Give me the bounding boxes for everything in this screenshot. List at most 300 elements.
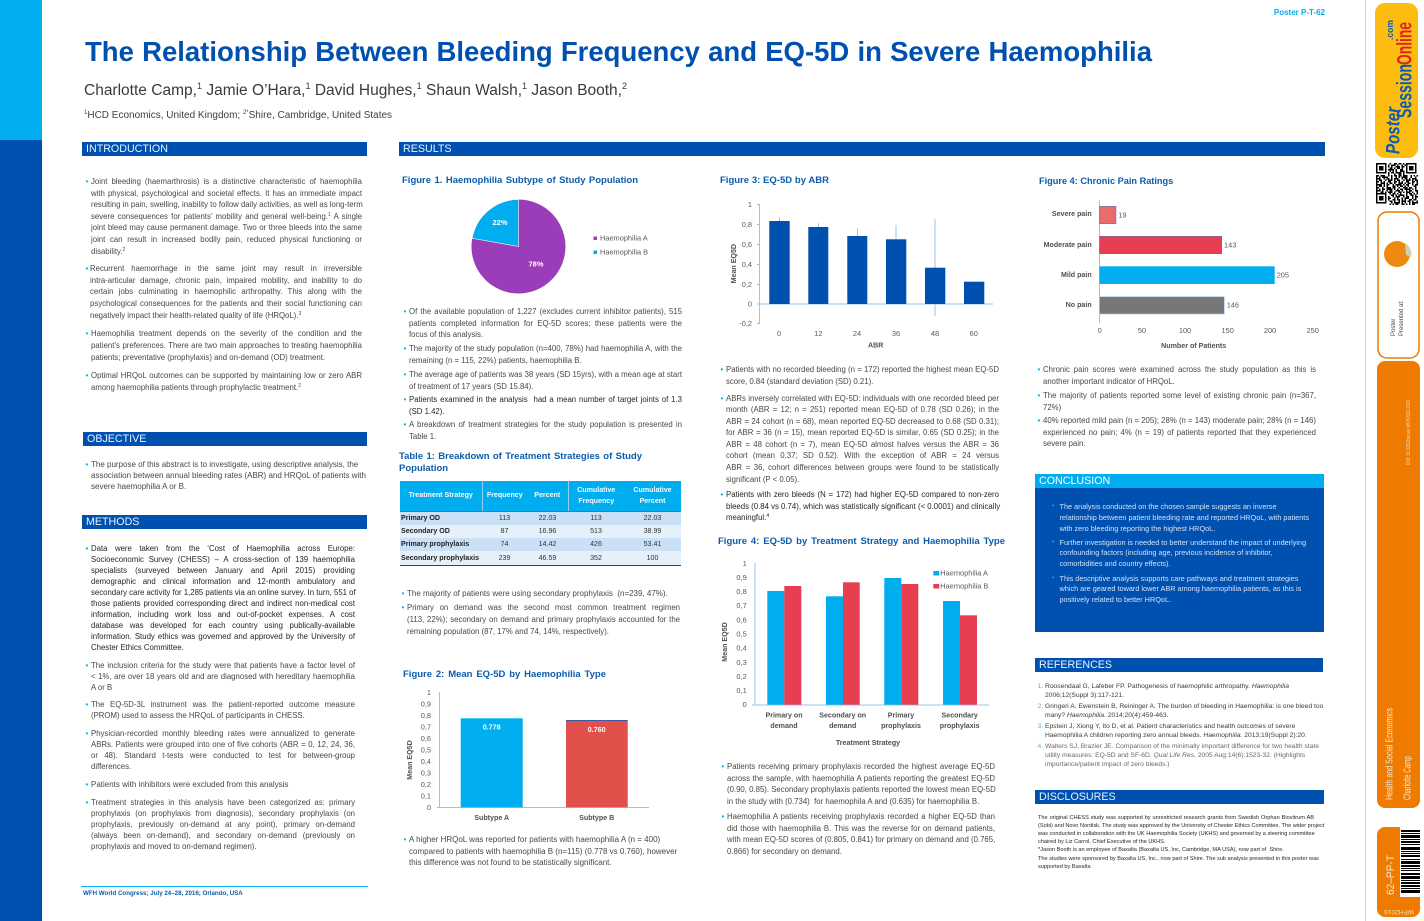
results text block 12: (0.90, 0.85). Secondary prophylaxis patients reported the lowest mean EQ-5D [727, 785, 996, 794]
bar chart: EQ-5D by ABR: ABR [868, 342, 883, 350]
text: references: 2006;12(Suppl 3):117-121. [1045, 692, 1124, 698]
results text block 5: Table 1. [409, 432, 436, 441]
bar chart: EQ-5D by treatment strategy and haemophilia type: 0,4 [736, 644, 747, 653]
horizontal bar chart: chronic pain ratings: 200 [1264, 326, 1276, 335]
bar chart: mean EQ-5D by haemophilia type: 0 [427, 803, 431, 812]
logo: Poster Session Online: Poster [1384, 106, 1404, 154]
text: introduction bullet 2 [86, 264, 362, 320]
heading: conclusion: CONCLUSION [1039, 475, 1110, 487]
text: • [404, 307, 406, 316]
text: • [404, 835, 406, 844]
text: methods bullet 3 [86, 700, 355, 720]
panel: orange topic strip: Charlotte Camp [1402, 756, 1414, 800]
text: methods bullet 1: specialists (surveyed between January and April 2015) providing [91, 566, 355, 575]
results text block 11: bleeds (0.84 vs 0.74), which was statistically significant (< 0.0001) and clinically [726, 502, 1000, 511]
text: references: Walters SJ, Brazier JE. Comparison of the minimally important difference for two health state [1045, 743, 1319, 750]
footer congress line: WFH World Congress; July 24–28, 2016; Orlando, USA [83, 890, 243, 897]
text: references: importance/patient impact of zero bleeds.) [1045, 761, 1170, 768]
text: • [86, 177, 88, 186]
text: methods bullet 6: prophylaxis (on prophylaxis from diagnosis), secondary prophylaxis (on [91, 809, 355, 818]
pie chart: haemophilia subtype: Haemophilia A [600, 234, 648, 242]
results text block 7: remaining population (87, 17% and 74, 14%, respectively). [407, 627, 609, 636]
text: • [404, 370, 406, 379]
text: introduction bullet 2: certain jobs culminating in haemophilic arthropathy. This along with the [90, 287, 362, 296]
heading: methods [82, 515, 367, 529]
bar chart: mean EQ-5D by haemophilia type: 0,6 [421, 734, 431, 743]
bar chart: EQ-5D by treatment strategy and haemophilia type: Primary [888, 711, 914, 719]
results text block 4 [404, 395, 682, 416]
panel: conclusion: • [1052, 539, 1054, 546]
results text block 1: patients completed information for EQ-5D scores; these patients were the [409, 319, 682, 328]
text: methods bullet 3: (PROM) used to assess the HRQoL of participants in CHESS. [91, 711, 305, 720]
text: disclosures: chaired by Liz Carrol, Chief Executive of the UKHS. [1038, 839, 1165, 845]
horizontal bar chart: chronic pain ratings: 250 [1307, 326, 1319, 335]
bar chart: mean EQ-5D by haemophilia type: Subtype B [579, 814, 614, 822]
text: introduction bullet 4: Optimal HRQoL outcomes can be supported by maintaining low or zero ABR [91, 371, 362, 380]
heading: disclosures: DISCLOSURES [1039, 791, 1116, 803]
panel: orange topic strip: DOI: 10.3252/pso.eu.WFH2016.2016 [1406, 400, 1412, 465]
text: introduction bullet 1: disability.2 [91, 247, 125, 256]
results text block 6: The majority of patients were using secondary prophylaxis (n=239, 47%). [407, 589, 668, 598]
text: conclusion bullet 3 [1052, 574, 1301, 604]
footer congress line [81, 886, 368, 898]
horizontal bar chart: chronic pain ratings [1044, 200, 1319, 350]
table 1: 38.99 [644, 527, 661, 535]
title: The Relationship Between Bleeding Frequency and EQ-5D in Severe Haemophilia [85, 36, 1152, 67]
results text block 10: ABR = 24 cohort (n = 68), mean reported EQ-5D decreased to 0.68 (SD 0.31); [726, 417, 999, 426]
text: objective: The purpose of this abstract is to investigate, using descriptive analysis, the [91, 460, 358, 469]
logo: Poster Session Online: Session [1394, 64, 1416, 118]
bar chart: EQ-5D by ABR: 60 [970, 329, 978, 338]
bar chart: EQ-5D by ABR: 0,8 [742, 220, 752, 229]
figure 4 chronic pain title: Figure 4: Chronic Pain Ratings [1039, 176, 1173, 186]
table 1: Treatment Strategy [409, 491, 473, 499]
text: methods bullet 4: differences. [91, 762, 131, 771]
heading: introduction [82, 142, 367, 156]
panel: poster presented at: Poster [1391, 319, 1397, 336]
results text block 1 [404, 307, 682, 339]
results text block 13: did those with haemophilia B. This was the reverse for on demand patients, [727, 824, 995, 833]
text: disclosures: The original CHESS study was supported by unrestricted research grants from Swedish Orphan Biovitrum AB [1038, 815, 1314, 821]
panel: poster code and barcode: WFH2016 [1383, 908, 1414, 914]
horizontal bar chart: chronic pain ratings: 19 [1118, 210, 1127, 220]
text: • [722, 762, 724, 771]
text: • [86, 729, 88, 738]
text: conclusion bullet 3: positively related to better HRQoL. [1060, 595, 1171, 604]
text: conclusion bullet 2: comorbidities and country effects). [1060, 559, 1170, 568]
text: methods bullet 6 [86, 798, 355, 851]
bar chart: mean EQ-5D by haemophilia type: 0,2 [421, 780, 431, 789]
bar chart: EQ-5D by ABR: -0,2 [739, 319, 752, 328]
table 1: Percent [639, 497, 666, 505]
text: • [402, 603, 404, 612]
results text block 16 [1038, 416, 1316, 448]
table 1: 16.96 [539, 527, 556, 535]
heading: methods: METHODS [86, 516, 139, 528]
results text block 10: ABR = 48 cohort (n = 7), mean EQ-5D almost halves versus the ABR = 36 [726, 440, 999, 449]
text: methods bullet 4 [86, 729, 355, 771]
text: references: Gringeri A, Ewenstein B, Reininger A. The burden of bleeding in Haemophilia: is one bleed too [1045, 703, 1323, 710]
results text block 7: (113, 22%); secondary on demand and primary prophylaxis accounted for the [407, 615, 680, 624]
bar chart: mean EQ-5D by haemophilia type: 0,1 [421, 791, 431, 800]
results text block 16: experienced no pain; 4% (n = 19) of patients reported that they experienced [1043, 428, 1316, 437]
horizontal bar chart: chronic pain ratings: 100 [1179, 326, 1191, 335]
bar chart: EQ-5D by treatment strategy and haemophilia type: 0,1 [736, 686, 747, 695]
results text block 14: another important indicator of HRQoL. [1043, 377, 1175, 386]
bar chart: EQ-5D by treatment strategy and haemophilia type: Haemophilia A [940, 568, 988, 578]
text: methods bullet 1: information, including work loss and out-of-pocket expenses. A cost [91, 610, 355, 619]
text: 3. [1038, 723, 1043, 730]
text: methods bullet 1: Socioeconomic Survey (CHESS) – A cross-section of 139 haemophilia [91, 555, 355, 564]
bar chart: mean EQ-5D by haemophilia type: 0,4 [421, 757, 431, 766]
table 1: 22.03 [644, 514, 661, 522]
horizontal bar chart: chronic pain ratings: Moderate pain [1044, 241, 1092, 249]
text: objective: association between annual bleeding rates (ABR) and HRQoL of patients with [91, 471, 366, 480]
text: disclosures [1038, 815, 1324, 870]
figure 4 title: Figure 4: EQ-5D by Treatment Strategy and Haemophilia Type [718, 536, 1005, 546]
results text block 10: for ABR = 36 (n = 15), mean reported EQ-5D is similar, 0.65 (SD 0.25); in the [726, 428, 999, 437]
horizontal bar chart: chronic pain ratings: No pain [1066, 301, 1092, 309]
panel: poster presented at [1377, 211, 1420, 359]
bar chart: mean EQ-5D by haemophilia type: Subtype A [474, 814, 509, 822]
table 1: 113 [499, 514, 510, 522]
bar chart: EQ-5D by ABR: Mean EQ5D [730, 244, 738, 283]
results text block 7 [402, 603, 680, 636]
text: conclusion bullet 1 [1052, 502, 1309, 532]
bar chart: EQ-5D by ABR: 36 [892, 329, 900, 338]
bar chart: mean EQ-5D by haemophilia type: 0,7 [421, 722, 431, 731]
bar chart: mean EQ-5D by haemophilia type: 0,3 [421, 768, 431, 777]
panel: orange topic strip: Health and Social Economics [1384, 708, 1396, 800]
text: • [86, 780, 88, 789]
results text block 11: Patients with zero bleeds (N = 172) had higher EQ-5D compared to non-zero [726, 490, 999, 499]
panel: conclusion [1035, 474, 1324, 632]
heading: objective [83, 432, 367, 446]
bar chart: EQ-5D by treatment strategy and haemophilia type: 0,7 [736, 601, 747, 610]
text: methods bullet 3: The EQ-5D-3L instrument was the patient-reported outcome measure [91, 700, 355, 709]
text: • [86, 661, 88, 670]
panel: poster presented at: Presented at: [1399, 300, 1405, 336]
bar chart: EQ-5D by treatment strategy and haemophilia type: Haemophilia B [940, 582, 988, 590]
text: introduction bullet 2: Recurrent haemorrhage in the same joint may result in irreversible [90, 264, 362, 273]
icon: QR code [1376, 163, 1418, 205]
results text block 9: Patients with no recorded bleeding (n = 172) reported the highest mean EQ-5D [726, 365, 999, 374]
table 1: 87 [501, 527, 508, 535]
text: introduction bullet 2: intra-articular damage, chronic pain, impaired mobility, and inability to do [90, 276, 362, 285]
text: conclusion bullet 3: This descriptive analysis supports care pathways and treatment strategies [1060, 574, 1298, 583]
results text block 15: 72%) [1043, 402, 1061, 412]
text: methods bullet 4: or 48). Standard t-tests were conducted to test for between-group [91, 751, 355, 760]
text: methods bullet 6: prophylaxis and moved to on-demand regimen). [91, 842, 257, 851]
text: • [720, 490, 723, 499]
text: • [86, 371, 88, 380]
results text block 12: across the sample, with haemophilia A patients reporting the greatest EQ-5D [727, 774, 995, 782]
horizontal bar chart: chronic pain ratings: 50 [1138, 326, 1146, 335]
bar chart: EQ-5D by ABR: 0,2 [742, 280, 752, 289]
text: • [86, 329, 88, 338]
table 1: Primary OD [401, 514, 440, 522]
text: objective: severe haemophilia A or B. [91, 482, 186, 491]
heading: references [1035, 658, 1323, 672]
bar chart: EQ-5D by treatment strategy and haemophilia type: Mean EQ5D [721, 622, 729, 662]
text: introduction bullet 4 [86, 371, 362, 392]
panel: poster code and barcode [1377, 827, 1420, 919]
table 1: 352 [590, 554, 602, 562]
text: introduction bullet 3: Haemophilia treatment depends on the severity of the condition and the [91, 329, 362, 338]
pie chart: haemophilia subtype: 78% [528, 260, 544, 268]
results text block 12: Patients receiving primary prophylaxis recorded the highest average EQ-5D [727, 762, 995, 771]
text: disclosures: (Sobi) and Novo Nordisk. The study was approved by the University of Chester Ethics Committee. The wider project [1038, 823, 1324, 829]
text: • [1038, 365, 1040, 374]
bar chart: EQ-5D by ABR: 0 [748, 300, 752, 308]
panel: poster code and barcode: 62–PP-T [1385, 855, 1397, 895]
heading: references: REFERENCES [1039, 659, 1112, 671]
text: introduction bullet 2: psychological consequences for the patients and their social functioning can [90, 299, 362, 308]
table 1: 14.42 [539, 540, 556, 548]
bar chart: EQ-5D by ABR: 48 [931, 329, 939, 338]
heading: results: RESULTS [403, 143, 452, 155]
text: introduction bullet 1: resulting in pain, swelling, inability to follow daily activities, as well as long-term [91, 200, 363, 209]
bar chart: EQ-5D by treatment strategy and haemophilia type: Secondary on [819, 711, 866, 719]
bar chart: mean EQ-5D by haemophilia type: 0,9 [421, 699, 431, 708]
bar chart: EQ-5D by ABR [730, 200, 993, 350]
text: • [404, 395, 406, 404]
text: introduction bullet 2: negatively impact their health-related quality of life (HRQoL).3 [90, 311, 301, 320]
logo: Poster Session Online: .com [1385, 20, 1395, 40]
results text block 16: severe pain. [1043, 439, 1085, 448]
results text block 11: meaningful.4 [726, 513, 769, 522]
bar chart: mean EQ-5D by haemophilia type: 1 [427, 688, 431, 697]
bar chart: mean EQ-5D by haemophilia type: 0,8 [421, 711, 431, 720]
text: disclosures: *Jason Booth is an employee of Baxalta (Baxalta US, Inc, Cambridge, MA USA), now part of Shire. [1038, 847, 1284, 853]
text: conclusion bullet 2: confounding factors (including age, previous incidence of inhibitor, [1060, 548, 1272, 557]
text: methods bullet 1: secondary care activity for 1,285 patients via an online survey. In turn, 551 of [91, 588, 356, 597]
results text block 15 [1038, 391, 1316, 412]
text: disclosures: The studies were sponsored by Baxalta US, Inc., now part of Shire. The sub analysis presented in this poster was [1038, 856, 1319, 862]
results text block 10: ABR = 36, cohort differences between groups were found to be statistically [726, 463, 999, 472]
text: methods bullet 2: The inclusion criteria for the study were that patients have a factor level of [91, 661, 355, 670]
text: methods bullet 1: demographic and clinical information and 12-month ambulatory and [91, 577, 355, 586]
table 1: 426 [590, 540, 602, 548]
poster number: Poster P-T-62 [1274, 8, 1325, 17]
text: methods bullet 1: Chester Ethics Committee. [91, 643, 184, 652]
bar chart: EQ-5D by ABR: 24 [853, 329, 861, 338]
bar chart: EQ-5D by ABR: 1 [748, 200, 752, 209]
text: references [1038, 682, 1324, 768]
bar chart: EQ-5D by ABR: 0,4 [742, 260, 752, 269]
text: methods bullet 1: database was developed for each country using publically-available [91, 621, 355, 630]
table 1: Frequency [578, 497, 614, 505]
text: introduction bullet 1: with physical, psychological and societal effects. It has an immediate impact [91, 189, 362, 198]
bar chart: mean EQ-5D by haemophilia type: Mean EQ5D [406, 740, 414, 780]
text: references: Roosendaal G, Lafeber FP. Pathogenesis of haemophilic arthropathy. Haemophilia [1045, 682, 1289, 690]
text: • [402, 589, 404, 598]
text: methods bullet 2: A or B [91, 683, 112, 692]
text: conclusion bullet 1: The analysis conducted on the chosen sample suggests an inverse [1060, 502, 1277, 510]
results text block 13: Haemophilia A patients receiving prophylaxis recorded a higher EQ-5D than [727, 812, 995, 821]
bar chart: EQ-5D by treatment strategy and haemophilia type: 1 [743, 559, 747, 568]
figure 2 title: Figure 2: Mean EQ-5D by Haemophilia Type [403, 669, 606, 680]
left colour band [0, 0, 42, 921]
text: introduction bullet 1: joint bleed may cause permanent damage. Two or three bleeds into the same [91, 223, 362, 232]
table 1 title: Population [399, 463, 448, 474]
results text block 8 [404, 835, 678, 867]
pie chart: haemophilia subtype: 22% [492, 218, 508, 227]
pie chart: haemophilia subtype [471, 200, 648, 294]
text: conclusion bullet 1: with zero bleeding reporting the highest HRQoL. [1060, 524, 1215, 532]
bar chart: EQ-5D by treatment strategy and haemophilia type: 0,5 [736, 630, 747, 638]
text: introduction bullet 1: severe consequences for patients’ mobility and general well-being.1 A single [91, 212, 362, 221]
table 1: 46.59 [539, 554, 556, 562]
bar chart: EQ-5D by treatment strategy and haemophilia type: 0,6 [736, 615, 747, 624]
bar chart: EQ-5D by treatment strategy and haemophilia type: 0 [743, 700, 747, 709]
text: references: many? Haemophilia. 2014;20(4):459-463. [1045, 712, 1168, 719]
panel: conclusion: • [1052, 575, 1054, 582]
bar chart: EQ-5D by treatment strategy and haemophilia type: 0,3 [736, 658, 747, 667]
figure 3 title: Figure 3: EQ-5D by ABR [720, 175, 829, 186]
horizontal bar chart: chronic pain ratings: Mild pain [1061, 271, 1092, 279]
text: methods bullet 5: Patients with inhibitors were excluded from this analysis [91, 780, 288, 789]
results text block 2: The majority of the study population (n=400, 78%) had haemophilia A, with the [409, 344, 682, 353]
results text block 13 [722, 812, 995, 856]
bar chart: EQ-5D by ABR: 12 [814, 329, 822, 338]
text: introduction bullet 1: joint can result in increased bodily pain, reduced physical functioning or [91, 235, 362, 244]
text: • [722, 812, 724, 821]
text: methods bullet 1 [86, 544, 356, 652]
results text block 12: in the study with (0.734) for haemophila A and (0.635) for haemophilia B. [727, 796, 979, 806]
bar chart: mean EQ-5D by haemophilia type: 0.760 [588, 725, 606, 734]
bar chart: EQ-5D by ABR: 0 [777, 329, 781, 338]
text: 2. [1038, 703, 1043, 710]
horizontal bar chart: chronic pain ratings: 150 [1222, 326, 1234, 335]
text: • [86, 798, 88, 807]
heading: objective: OBJECTIVE [87, 433, 146, 445]
text: conclusion bullet 2 [1052, 538, 1306, 568]
table 1: Secondary OD [401, 527, 450, 535]
bar chart: EQ-5D by treatment strategy and haemophilia type: 0,2 [736, 672, 747, 681]
text: introduction bullet 3: patients; preventative (prophylaxis) and on-demand (OD) treatment. [91, 353, 325, 362]
bar chart: EQ-5D by ABR: 0,6 [742, 240, 752, 249]
results text block 8: compared to patients with haemophilia B (n=115) (0.778 vs 0.760), however [409, 846, 677, 856]
text: • [720, 394, 723, 402]
text: 1. [1038, 682, 1043, 690]
results text block 16: 40% reported mild pain (n = 205); 28% (n = 143) moderate pain; 28% (n = 146) [1043, 416, 1316, 425]
results text block 10: month (ABR = 12; n = 251) reported mean EQ-5D of 0.78 (SD 0.26); in the [726, 405, 999, 414]
table 1: 53.41 [644, 540, 661, 548]
text: objective [86, 460, 366, 491]
results text block 10: significant (P < 0.05). [726, 475, 799, 484]
bar chart: EQ-5D by treatment strategy and haemophilia type: prophylaxis [881, 722, 921, 730]
text: introduction bullet 1: Joint bleeding (haemarthrosis) is a distinctive characteristic of haemophilia [91, 177, 362, 186]
horizontal bar chart: chronic pain ratings: 0 [1098, 326, 1102, 335]
text: methods bullet 2: < 1%, are over 18 years old and are diagnosed with hereditary haemophilia [91, 672, 355, 681]
text: • [86, 700, 88, 709]
table 1: Cumulative [633, 486, 672, 494]
horizontal bar chart: chronic pain ratings: 205 [1277, 270, 1289, 280]
text: methods bullet 1: Data were taken from the ‘Cost of Haemophilia across Europe: [91, 544, 355, 553]
heading: results [399, 142, 1325, 156]
bar chart: EQ-5D by treatment strategy and haemophilia type: demand [770, 722, 798, 730]
text: • [1038, 416, 1040, 425]
table 1: Primary prophylaxis [401, 540, 469, 548]
results text block 2: remaining (n = 115, 22%) patients, haemophilia B. [409, 356, 582, 365]
text: introduction bullet 4: among haemophilia patients through prophylactic treatment.2 [91, 383, 301, 392]
text: methods bullet 6: Treatment strategies in this analysis have been categorized as: primary [91, 798, 355, 807]
text: • [1038, 391, 1040, 400]
table 1: 74 [501, 540, 508, 548]
results text block 14 [1038, 365, 1316, 386]
authors: Charlotte Camp,1 Jamie O’Hara,1 David Hughes,1 Shaun Walsh,1 Jason Booth,2 [84, 81, 627, 99]
table 1: Frequency [487, 491, 523, 499]
heading: introduction: INTRODUCTION [86, 143, 168, 155]
results text block 9: score, 0.84 (standard deviation (SD) 0.21). [726, 377, 873, 386]
text: • [404, 344, 406, 353]
table 1: Percent [534, 491, 560, 499]
text: methods bullet 4: Physician-recorded monthly bleeding rates were annualized to generate [91, 729, 355, 738]
bar chart: EQ-5D by treatment strategy and haemophilia type: 0,9 [736, 573, 747, 582]
text: disclosures: was conducted in collaboration with the UK Haemophilia Society (UKHS) and governed by a steering committee [1038, 831, 1315, 837]
bar chart: EQ-5D by treatment strategy and haemophilia type: 0,8 [736, 587, 747, 596]
bar chart: EQ-5D by treatment strategy and haemophilia type [721, 559, 989, 747]
bar chart: EQ-5D by treatment strategy and haemophilia type: demand [829, 722, 856, 730]
results text block 3: The average age of patients was 38 years (SD 15yrs), with a mean age at start [409, 370, 682, 379]
table 1 title [399, 451, 642, 474]
sidebar divider [1365, 0, 1366, 921]
bar chart: mean EQ-5D by haemophilia type [406, 688, 649, 822]
text: 4. [1038, 743, 1043, 750]
table 1: 100 [647, 554, 658, 562]
horizontal bar chart: chronic pain ratings: Number of Patients [1161, 342, 1226, 350]
results text block 3: of treatment of 17 years (SD 15.84). [409, 382, 533, 391]
text: conclusion bullet 1: relationship between patient bleeding rate and reported HRQoL, with patients [1060, 512, 1309, 522]
heading: conclusion [1035, 474, 1324, 488]
panel: orange topic strip [1377, 361, 1420, 808]
results text block 5: A breakdown of treatment strategies for the study population is presented in [409, 420, 682, 429]
results text block 10 [720, 394, 999, 484]
pie chart: haemophilia subtype: Haemophilia B [600, 248, 648, 256]
text: • [86, 264, 88, 273]
text: introduction bullet 3 [86, 329, 362, 362]
results text block 4: Patients examined in the analysis had a mean number of target joints of 1.3 [409, 395, 682, 404]
results text block 9 [720, 365, 999, 386]
results text block 15: The majority of patients reported some level of existing chronic pain (n=367, [1043, 391, 1316, 400]
results text block 3 [404, 370, 682, 391]
text: conclusion bullet 2: Further investigation is needed to better understand the impact of underlying [1060, 538, 1306, 547]
text: references: Epstein J, Xiong Y, Ito D, et al. Patient characteristics and health outcomes of severe [1045, 723, 1295, 730]
panel: conclusion: • [1052, 502, 1054, 510]
table 1: Secondary prophylaxis [401, 554, 479, 562]
results text block 12 [722, 762, 996, 806]
logo: Poster Session Online [1375, 3, 1419, 159]
results text block 10: cohort (mean 0.37; SD 0.52). With the exception of ABR = 24 versus [726, 451, 999, 460]
results text block 10: ABRs inversely correlated with EQ-5D: individuals with one recorded bleed per [726, 394, 999, 402]
horizontal bar chart: chronic pain ratings: Severe pain [1052, 210, 1092, 218]
text: • [86, 544, 88, 553]
text: conclusion bullet 3: which are geared toward lower ABR among haemophilia patients, as this is [1060, 584, 1301, 593]
text: methods bullet 1: those patients provided corresponding direct and indirect non-medical cost [91, 599, 355, 608]
bar chart: EQ-5D by treatment strategy and haemophilia type: Treatment Strategy [836, 739, 900, 747]
text: • [404, 420, 406, 429]
text: introduction bullet 1 [86, 177, 363, 256]
table 1: Cumulative [577, 486, 615, 494]
text: • [86, 460, 88, 469]
results text block 2 [404, 344, 682, 365]
horizontal bar chart: chronic pain ratings: 146 [1227, 300, 1239, 310]
table 1: 239 [499, 554, 510, 562]
results text block 7: Primary on demand was the second most common treatment regimen [407, 603, 680, 612]
text: methods bullet 1: information. Study ethics was governed and approved by the University of [91, 632, 355, 641]
results text block 13: with mean EQ-5D scores of (0.805, 0.841) for primary on demand and (0.765, [727, 835, 995, 844]
